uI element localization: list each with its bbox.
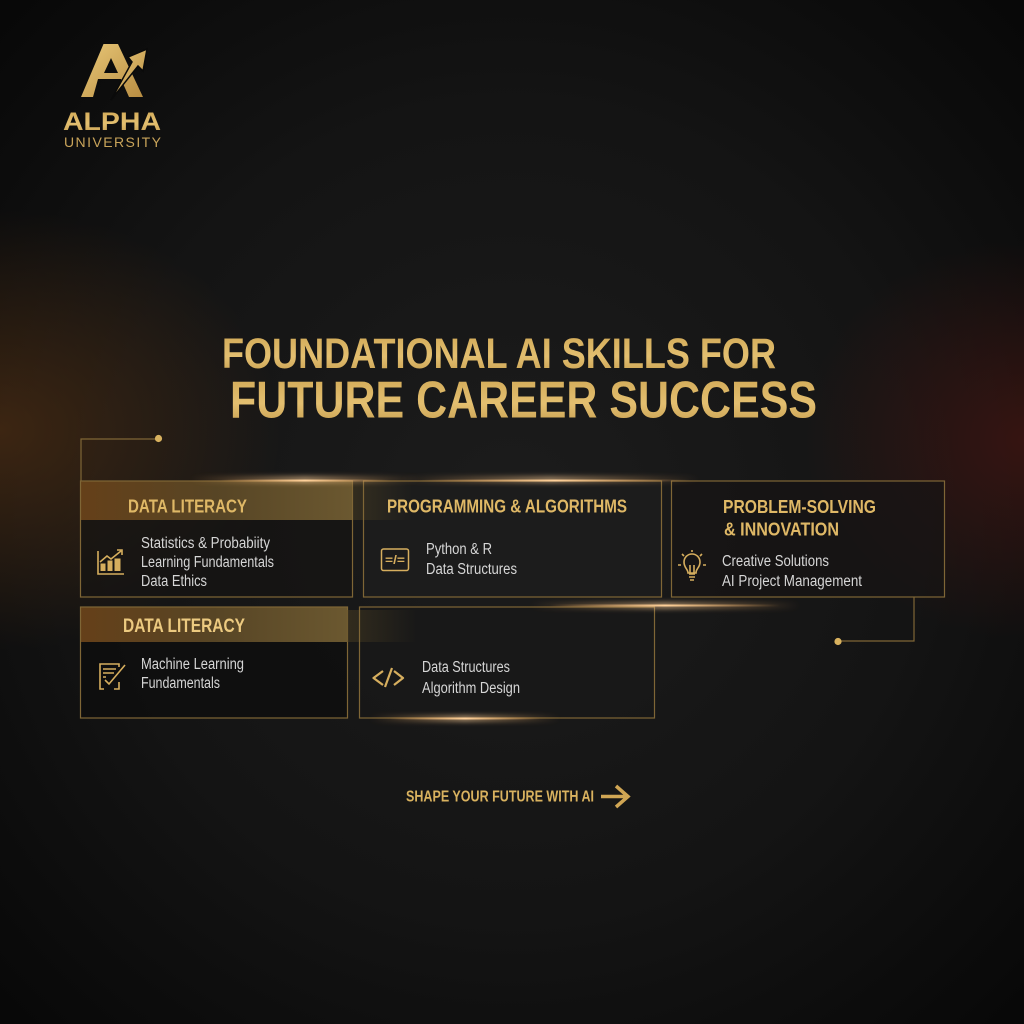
call to action: SHAPE YOUR FUTURE WITH AI	[406, 788, 594, 806]
connector: bottom right	[834, 597, 914, 645]
icon: code brackets	[374, 668, 403, 687]
panel list: Python & R	[426, 541, 492, 558]
panel list: Fundamentals	[141, 675, 220, 692]
panel list: AI Project Management	[722, 573, 863, 590]
panel list	[141, 656, 244, 692]
title: FUTURE CAREER SUCCESS	[230, 372, 817, 430]
panel: programming and algorithms	[353, 481, 662, 597]
panel list: Machine Learning	[141, 656, 244, 673]
panel heading: DATA LITERACY	[123, 615, 245, 637]
icon: checklist with pen	[100, 664, 125, 689]
icon: code window: =/=	[385, 553, 405, 567]
panel list: Data Structures	[422, 659, 510, 676]
panel heading: PROGRAMMING & ALGORITHMS	[387, 496, 627, 516]
panel header band	[80, 481, 352, 520]
arrow	[601, 786, 628, 807]
panel heading	[723, 496, 876, 540]
title	[222, 330, 817, 430]
icon: bar chart with arrow	[98, 550, 124, 574]
connector: top left	[81, 435, 162, 481]
panel list: Learning Fundamentals	[141, 554, 274, 571]
panel heading: DATA LITERACY	[128, 496, 248, 516]
panel: data literacy top	[80, 481, 352, 597]
title: FOUNDATIONAL AI SKILLS FOR	[222, 330, 776, 378]
panel header band	[80, 607, 347, 642]
panel: data structures and algorithm design	[347, 607, 654, 718]
panel: problem-solving and innovation	[671, 481, 944, 597]
panel list: Data Structures	[426, 561, 517, 578]
panel list: Algorithm Design	[422, 680, 520, 697]
panel list: Statistics & Probabiity	[141, 535, 270, 552]
icon: A with rising arrow	[81, 44, 147, 100]
panel list	[722, 553, 863, 590]
light beams on card edges	[190, 476, 800, 722]
panel list: Data Ethics	[141, 573, 207, 590]
icon: light bulb	[678, 550, 706, 580]
panel list	[141, 535, 274, 590]
panel: data literacy bottom	[80, 607, 348, 718]
logo: Alpha University	[63, 44, 162, 150]
icon: code window	[382, 549, 408, 570]
panel list: Creative Solutions	[722, 553, 829, 570]
panel heading: PROBLEM-SOLVING	[723, 496, 876, 517]
logo wordmark: ALPHA	[63, 108, 161, 136]
panel list	[426, 541, 517, 578]
panel list	[422, 659, 520, 697]
panel heading: & INNOVATION	[724, 518, 839, 540]
logo subtitle: UNIVERSITY	[64, 134, 162, 150]
